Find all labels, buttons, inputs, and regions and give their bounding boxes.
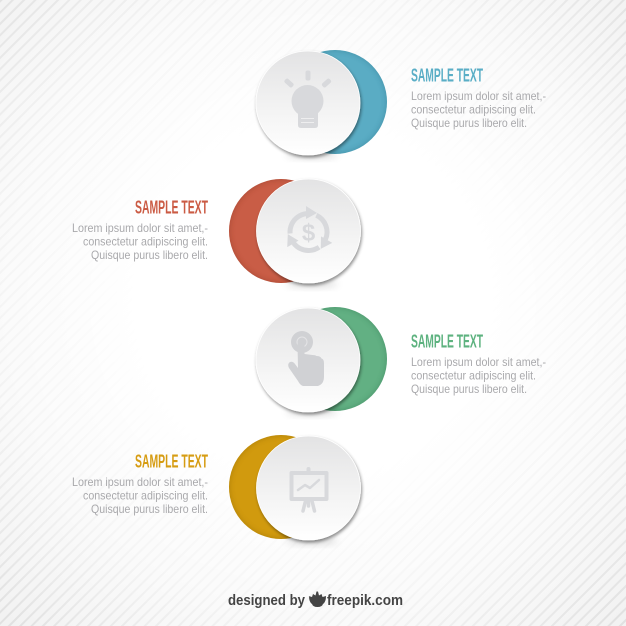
body text 2 — [72, 221, 208, 262]
body text 2: Quisque purus libero elit. — [91, 248, 208, 262]
white disc 3 — [256, 308, 360, 414]
footer credit: freepik.com — [327, 592, 403, 609]
body text 2: Lorem ipsum dolor sit amet,- — [72, 221, 208, 235]
yellow crescent — [229, 435, 296, 539]
body text 3: Quisque purus libero elit. — [411, 382, 527, 396]
green crescent — [320, 307, 387, 411]
body text 3: Lorem ipsum dolor sit amet,- — [411, 355, 546, 369]
body text 4: consectetur adipiscing elit. — [83, 488, 208, 502]
body text 1: Quisque purus libero elit. — [411, 116, 527, 130]
step 3: touch — [256, 305, 546, 414]
blue crescent — [320, 50, 387, 154]
body text 4: Quisque purus libero elit. — [91, 502, 208, 516]
body text 1 — [411, 89, 546, 130]
icon: presentation board — [292, 469, 326, 511]
step 4: presentation — [72, 433, 360, 544]
body text 1: Lorem ipsum dolor sit amet,- — [411, 89, 546, 103]
body text 4 — [72, 475, 208, 516]
footer credit — [228, 592, 403, 609]
heading: sample text blue: SAMPLE TEXT — [411, 64, 483, 86]
icon: freepik logo — [308, 592, 326, 607]
body text 3: consectetur adipiscing elit. — [411, 368, 536, 382]
footer credit: designed by — [228, 592, 306, 609]
white disc 4 — [256, 436, 360, 544]
white disc 1 — [256, 51, 360, 158]
icon: dollar cycle — [282, 206, 333, 257]
icon: pointing hand — [288, 331, 324, 386]
icon: dollar cycle: $ — [302, 220, 316, 246]
body text 3 — [411, 355, 546, 396]
red crescent — [229, 179, 294, 283]
body text 4: Lorem ipsum dolor sit amet,- — [72, 475, 208, 489]
white disc 2 — [256, 179, 360, 286]
body text 2: consectetur adipiscing elit. — [83, 234, 208, 248]
step 1: idea — [256, 48, 546, 158]
body text 1: consectetur adipiscing elit. — [411, 102, 536, 116]
heading: sample text green: SAMPLE TEXT — [411, 330, 483, 352]
icon: light bulb — [284, 70, 332, 128]
heading: sample text yellow: SAMPLE TEXT — [135, 450, 208, 472]
step 2: money cycle — [72, 177, 360, 286]
heading: sample text red: SAMPLE TEXT — [135, 196, 208, 218]
